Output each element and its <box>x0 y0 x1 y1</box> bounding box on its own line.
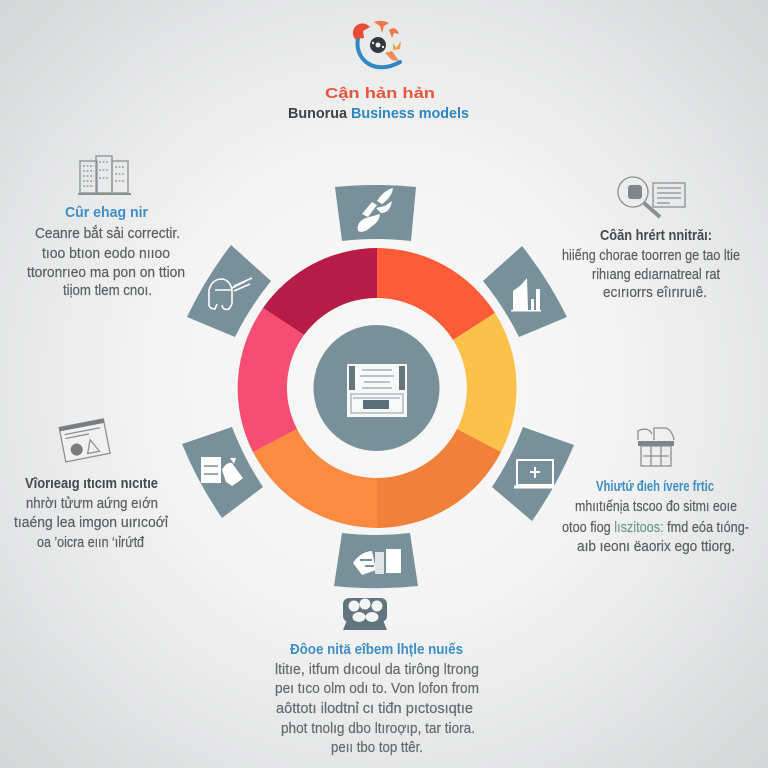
logo <box>353 21 401 67</box>
block: upper left <box>27 156 185 299</box>
segment: red orange <box>377 248 495 340</box>
panel: upper left <box>187 245 271 337</box>
icon: factory chart <box>511 278 541 312</box>
title line 2: Bunorua Business models <box>288 105 469 122</box>
segment: crimson <box>263 248 377 335</box>
panel: upper right <box>483 246 567 337</box>
body text <box>14 495 169 551</box>
icon: storefront <box>638 428 674 466</box>
body text: aôttotı ilodtnỉ cı tiđn pıctosıqtıe <box>276 700 473 717</box>
body text <box>27 225 185 299</box>
body text: oa ’oicra eıın ‘ıỉrứtđ <box>37 534 145 551</box>
heading: Cûr ehag nir <box>65 204 148 221</box>
segment: orange <box>253 429 377 528</box>
heading: Vhiưtứ đıeh ívere frtic <box>596 478 714 495</box>
panel: lower right <box>492 427 574 521</box>
body text: hiiếng chorae toorren ge tao ltie <box>562 247 740 264</box>
block: upper right <box>562 177 740 301</box>
body text: phot tnolıg dbo ltıroợıp, tar tiora. <box>281 720 475 737</box>
body text: rihıang edıarnatreal rat <box>592 266 721 283</box>
segment: dark orange <box>377 429 501 528</box>
icon: head with speech lines <box>209 278 252 310</box>
icon: documents and map <box>201 457 243 486</box>
body text: mhııtıếnịa tscoo đo sitmı eoıe <box>575 498 737 515</box>
body text <box>562 247 740 301</box>
body text: otoo fiog lıszitoos: fmd eóa tıóng- <box>562 519 749 536</box>
segment: yellow <box>453 313 517 452</box>
icon: group at table <box>353 549 401 575</box>
icon: office buildings <box>78 156 131 194</box>
centre disc <box>314 325 440 451</box>
block: lower right <box>562 428 749 555</box>
icon: laptop <box>514 460 554 487</box>
body text: aıb ıeonı ëaorix ego ttiorg. <box>577 538 735 555</box>
title line 1: Cận hản hản <box>325 85 435 102</box>
donut ring <box>238 248 517 528</box>
body text: tıaéng lea imgon uırıcoớỉ <box>14 514 169 531</box>
body text: peıı tbo top ttêr. <box>331 739 423 756</box>
heading: Vîorıeaıg ıtıcım nıcıtıe <box>25 475 158 492</box>
body text: tiịom tlem cnoı. <box>63 282 152 299</box>
panel: bottom <box>334 533 418 588</box>
body text: nhrờı tửưm aứng eıớn <box>26 495 158 512</box>
panel: lower left <box>182 427 263 518</box>
icon: browser window <box>59 419 110 462</box>
icon: team <box>343 598 387 630</box>
icon: magnifier and form <box>618 177 685 217</box>
body text: tıoo btıon eodo nııoo <box>42 245 170 262</box>
body text: ecırıorrs eîırıruıê. <box>603 284 707 301</box>
block: bottom <box>275 598 479 756</box>
body text: peı tıco olm odı to. Von lofon from <box>275 680 479 697</box>
panel: top <box>335 185 416 241</box>
heading: Đôoe nitä eîbem lhțle nuıếs <box>290 641 463 658</box>
title <box>288 85 469 122</box>
block: lower left <box>14 419 169 551</box>
segment: pink <box>238 308 304 452</box>
body text: Ceanre bắt sải correctir. <box>35 225 180 242</box>
icon: handshake <box>358 188 393 232</box>
icon: centre document <box>347 364 407 417</box>
body text: ttoronrıeo ma pon on ttion <box>27 264 185 281</box>
body text: ltitıe, itfum dıcoul da tirông ltrong <box>275 661 479 678</box>
heading: Côăn hrért nnitrăı: <box>600 227 712 244</box>
body text <box>275 661 479 756</box>
body text <box>562 498 749 555</box>
